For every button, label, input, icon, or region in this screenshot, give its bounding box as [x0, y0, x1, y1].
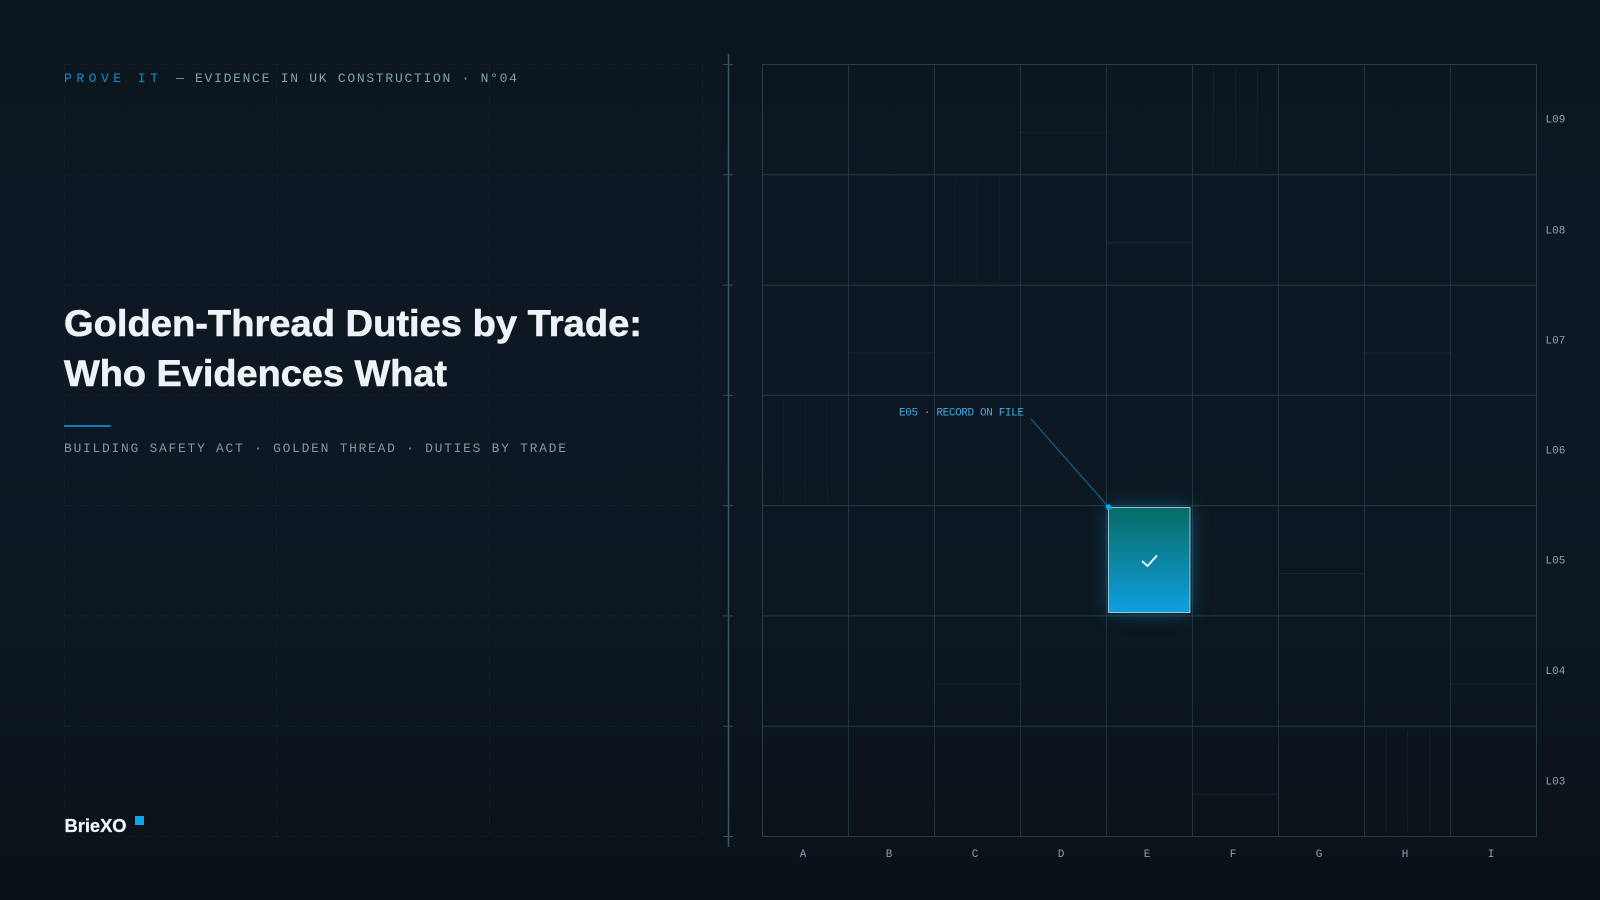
matrix grid: trades by levels: [762, 64, 1536, 836]
trade column labels: H: [1402, 849, 1408, 861]
level labels: L06: [1546, 446, 1565, 458]
trade column labels: C: [972, 849, 979, 861]
level axis with ticks: [723, 54, 733, 847]
level labels: L05: [1546, 556, 1565, 568]
subtitle: BUILDING SAFETY ACT · GOLDEN THREAD · DUTIES BY TRADE: [64, 441, 566, 456]
eyebrow: series label: PROVE IT: [64, 71, 158, 86]
callout label: E05 · RECORD ON FILE: [899, 408, 1024, 420]
trade column labels: G: [1316, 849, 1322, 861]
trade column labels: B: [886, 849, 893, 861]
trade column labels: [800, 849, 1494, 861]
logo: BrieXO wordmark with square: BrieXO: [64, 816, 126, 836]
trade column labels: I: [1488, 849, 1494, 861]
title: [64, 303, 642, 394]
level labels: L08: [1546, 226, 1565, 238]
level labels: [1546, 114, 1566, 788]
icon: check mark: [1142, 556, 1157, 566]
level labels: L04: [1546, 666, 1566, 678]
evidence cell E05 with check: [1108, 508, 1190, 612]
accent rule: [64, 425, 110, 427]
level labels: L09: [1546, 114, 1565, 126]
title: Golden-Thread Duties by Trade:: [64, 303, 642, 344]
trade column labels: A: [800, 849, 807, 861]
trade column labels: E: [1144, 849, 1151, 861]
level labels: L07: [1546, 336, 1565, 348]
callout leader line: [1031, 419, 1111, 510]
title: Who Evidences What: [64, 353, 447, 394]
trade column labels: F: [1230, 849, 1236, 861]
eyebrow: series label: — EVIDENCE IN UK CONSTRUCTION · N°04: [175, 71, 517, 86]
level labels: L03: [1546, 776, 1565, 788]
trade column labels: D: [1058, 849, 1065, 861]
